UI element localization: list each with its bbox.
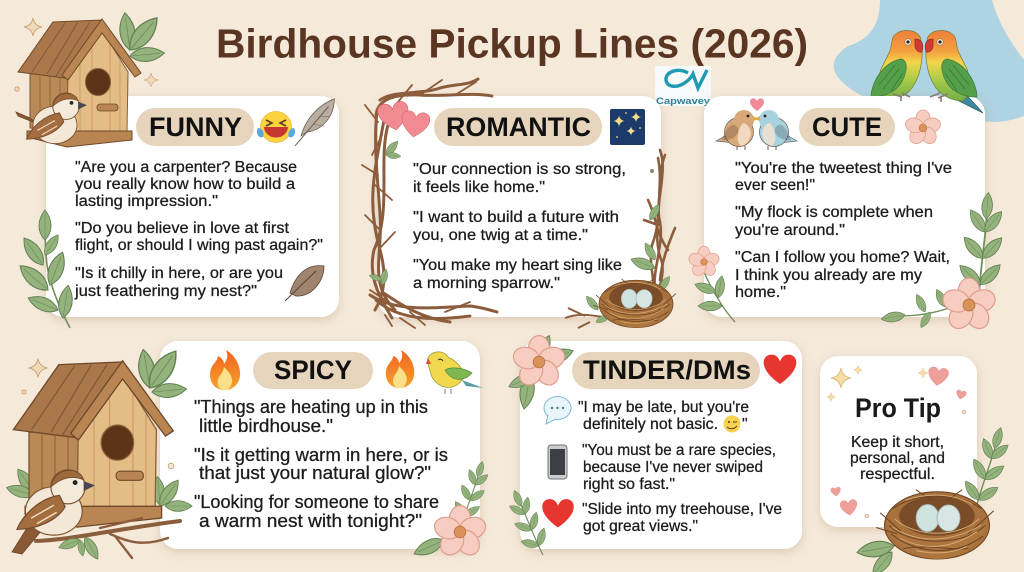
cute lines: ever seen!" [735,177,815,194]
icon: fire left [210,350,240,390]
panel: cute [704,96,985,317]
spicy lines: a warm nest with tonight?" [199,511,422,531]
romantic lines: it feels like home." [413,179,545,196]
icon: laughing emoji [257,112,295,142]
cute lines [735,160,952,301]
sprig bottom cute [881,288,960,329]
twig leaves [368,139,672,292]
leaves under branch [57,534,102,562]
leaves pro tip nest [856,539,897,572]
lovebird left [865,30,923,113]
icon: birdhouse top-left leaves [117,12,165,63]
romantic lines [413,161,626,292]
icon: birdhouse spicy [13,361,173,527]
sprig spicy right [447,457,496,529]
tinder lines [578,399,782,535]
funny lines: "Do you believe in love at first [75,220,290,237]
pro tip body: personal, and [850,450,945,467]
leaves tinder flower [507,333,575,410]
tinder lines: right so fast." [583,476,675,493]
icon: nest romantic [565,279,676,328]
icon: flower tinder [511,336,567,389]
spicy label pill: SPICY [274,355,352,385]
icon: red heart top [764,355,796,384]
icon: sparrow spicy [12,470,95,554]
tinder label pill: TINDER/DMs [583,355,751,385]
branch under sparrow [36,518,180,558]
panel: romantic [378,96,661,317]
panel: tinder [520,341,802,549]
romantic lines: "Our connection is so strong, [413,161,626,178]
romantic lines: you, one twig at a time." [413,227,588,244]
icon: phone [548,445,567,479]
funny lines: just feathering my nest?" [74,283,257,300]
spicy label pill [253,352,373,389]
cute lines: you're around." [735,222,845,239]
tinder lines: "You must be a rare species, [582,442,776,459]
icon: birdhouse top-left [18,19,141,147]
cute lines: "You're the tweetest thing I've [735,160,952,177]
spicy lines: "Things are heating up in this [194,397,428,417]
funny lines: you really know how to build a [75,176,295,193]
icon: starry night [610,109,645,145]
icon: red heart [542,499,574,528]
lovebird right [925,30,983,113]
tinder lines: " [742,416,748,433]
spicy lines: "Looking for someone to share [194,492,439,512]
icon: small yellow bird [426,352,483,394]
romantic lines: "You make my heart sing like [413,257,622,274]
cute label pill [799,108,895,146]
romantic lines: a morning sparrow." [413,275,560,292]
cute lines: I think you already are my [735,267,922,284]
pro tip body [850,434,945,483]
panel: funny [46,96,339,317]
icon: fire right [386,350,414,388]
tinder lines: "Slide into my treehouse, I've [582,501,782,518]
pro tip body: Keep it short, [851,434,944,451]
icon: small flower and sprig [687,246,735,322]
romantic label pill: ROMANTIC [446,112,591,142]
background blue blob [834,0,1024,122]
tinder lines: definitely not basic. [583,416,718,433]
icon: flower cute [904,110,942,147]
dot [650,169,654,173]
icon: speech bubble [544,396,571,424]
cute label pill: CUTE [812,112,882,142]
tinder lines: got great views." [583,518,698,535]
romantic label pill [434,108,602,146]
sprig tinder bottom-left [499,485,556,562]
tinder lines: because I've never swiped [583,459,763,476]
icon: hearts [377,100,431,139]
cute lines: home." [735,284,786,301]
bird feet [893,93,948,102]
funny lines: "Are you a carpenter? Because [75,159,297,176]
spicy lines: "Is it getting warm in here, or is [194,445,448,465]
panel: pro tip [820,356,977,527]
cute lines: "Can I follow you home? Wait, [735,249,950,266]
pro tip body: respectful. [860,466,935,483]
spicy lines: little birdhouse." [199,416,333,436]
funny lines [74,159,323,300]
leaf spicy flower [411,534,447,560]
icon: sparrow top-left [16,93,87,144]
leaves spicy mid [5,466,192,511]
sparkles spicy [22,358,174,469]
title: Birdhouse Pickup Lines (2026) [216,20,808,66]
spicy lines [194,397,448,531]
twig frame [362,79,675,328]
funny label pill: FUNNY [149,112,242,142]
logo: Capwavey [655,66,711,106]
funny lines: "Is it chilly in here, or are you [75,265,283,282]
icon: winking face [724,416,740,432]
sparkles top-left [15,18,158,91]
funny label pill [136,108,254,146]
icon: nest pro tip [876,490,994,559]
icon: brown feather [285,266,324,301]
funny lines: flight, or should I wing past again?" [75,237,323,254]
tinder lines: "I may be late, but you're [578,399,749,416]
pro tip heading: Pro Tip [855,393,941,423]
leaves spicy top [136,346,187,399]
icon: grey feather [295,99,334,146]
romantic lines: "I want to build a future with [413,209,619,226]
logo: Capwavey: Capwavey [656,96,710,106]
icon: flower cute large [940,278,998,333]
panel: spicy [160,341,483,549]
icon: two birds and heart [716,98,797,150]
funny lines: lasting impression." [75,193,218,210]
sparkles and hearts [826,366,967,518]
spicy lines: that just your natural glow?" [199,463,431,483]
icon: flower spicy [432,506,488,559]
sprig cute right [954,190,1011,302]
cute lines: "My flock is complete when [735,204,933,221]
sprig pro tip [955,422,1018,517]
sprig funny left [15,210,75,328]
